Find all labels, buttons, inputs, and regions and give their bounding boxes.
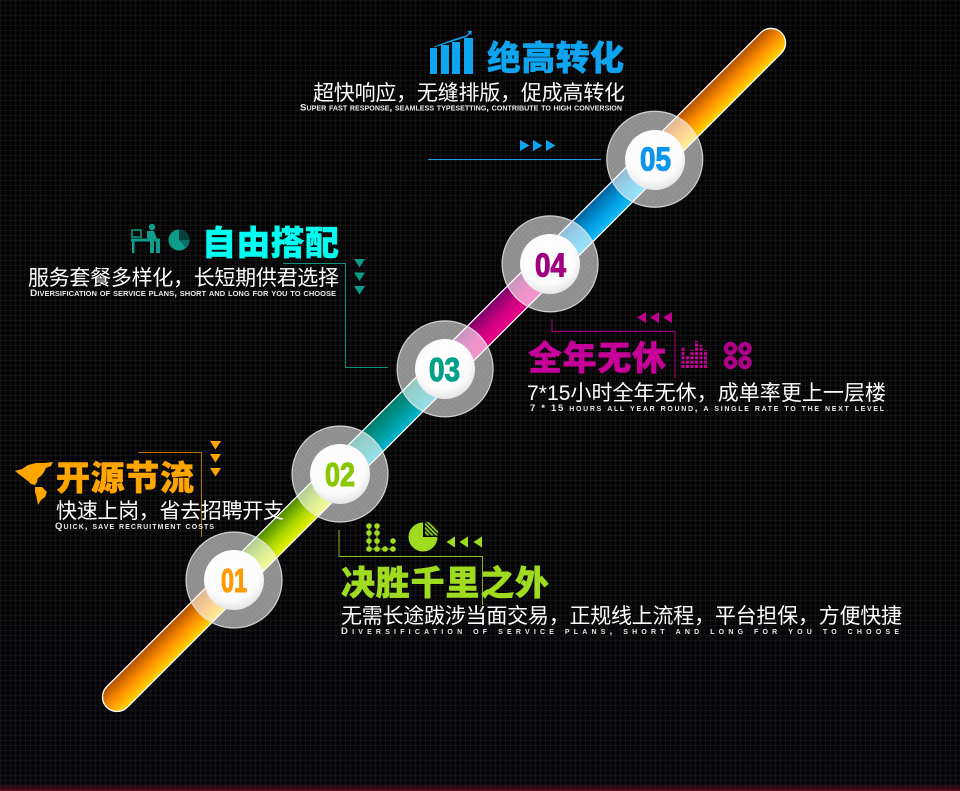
- tube colour segments: [103, 29, 785, 711]
- icon: dot matrix: [366, 523, 396, 552]
- icon: world map: [15, 462, 53, 505]
- node 05: [625, 130, 685, 190]
- icon: pie chart with hatched slice: [408, 522, 438, 552]
- heading: 决胜千里之外: [341, 564, 549, 603]
- node 01: [204, 550, 264, 610]
- english caption: Super fast response, seamless typesetting, contribute to high conversion: [300, 102, 622, 114]
- node 02: [310, 444, 370, 504]
- tube outline: [96, 22, 792, 718]
- icon: rising bar chart: [430, 31, 473, 74]
- rings behind tube: [166, 91, 723, 648]
- node 02: 02: [325, 456, 355, 493]
- block 01: save cost: [15, 460, 284, 532]
- icon: four dials: [726, 344, 750, 367]
- node 05: 05: [640, 140, 671, 178]
- heading: 绝高转化: [487, 40, 624, 78]
- block 03: free combination: [28, 224, 339, 299]
- ring outlines: [166, 91, 723, 648]
- icon: pie chart: [168, 230, 190, 250]
- icon: person at desk: [131, 224, 160, 253]
- subtitle: 超快响应，无缝排版，促成高转化: [313, 82, 625, 105]
- node 03: [415, 339, 475, 399]
- heading: 自由搭配: [202, 225, 339, 263]
- diagonal timeline tube: [102, 28, 786, 712]
- node 03: 03: [429, 351, 460, 388]
- subtitle: 快速上岗，省去招聘开支: [56, 500, 284, 523]
- block 05: high conversion: [300, 31, 625, 114]
- glass highlights inside rings: [192, 117, 697, 622]
- subtitle: 7*15小时全年无休，成单率更上一层楼: [527, 382, 886, 405]
- english caption: Quick, save recruitment costs: [55, 521, 214, 532]
- subtitle: 服务套餐多样化，长短期供君选择: [28, 267, 339, 290]
- node 01: 01: [221, 562, 247, 599]
- english caption: Diversification of service plans, short and long for you to choose: [30, 288, 336, 299]
- block 04: year round: [527, 340, 886, 414]
- heading: 全年无休: [528, 340, 666, 378]
- node 04: [520, 234, 580, 294]
- step 3 connector: [283, 259, 388, 368]
- step 5 connector: [428, 140, 601, 160]
- heading: 开源节流: [56, 460, 194, 498]
- icon: equaliser: [683, 341, 706, 368]
- connector lines and arrows: [138, 140, 675, 605]
- step 4 connector: [552, 312, 675, 378]
- step 2 connector: [339, 530, 482, 605]
- english caption: Diversification of service plans, short and long for you to choose: [341, 626, 899, 637]
- node 04: 04: [535, 246, 567, 284]
- block 02: win from afar: [341, 522, 902, 637]
- step 1 connector: [138, 441, 221, 537]
- subtitle: 无需长途跋涉当面交易，正规线上流程，平台担保，方便快捷: [341, 605, 902, 628]
- english caption: 7 * 15 hours all year round, a single rate to the next level: [530, 403, 885, 414]
